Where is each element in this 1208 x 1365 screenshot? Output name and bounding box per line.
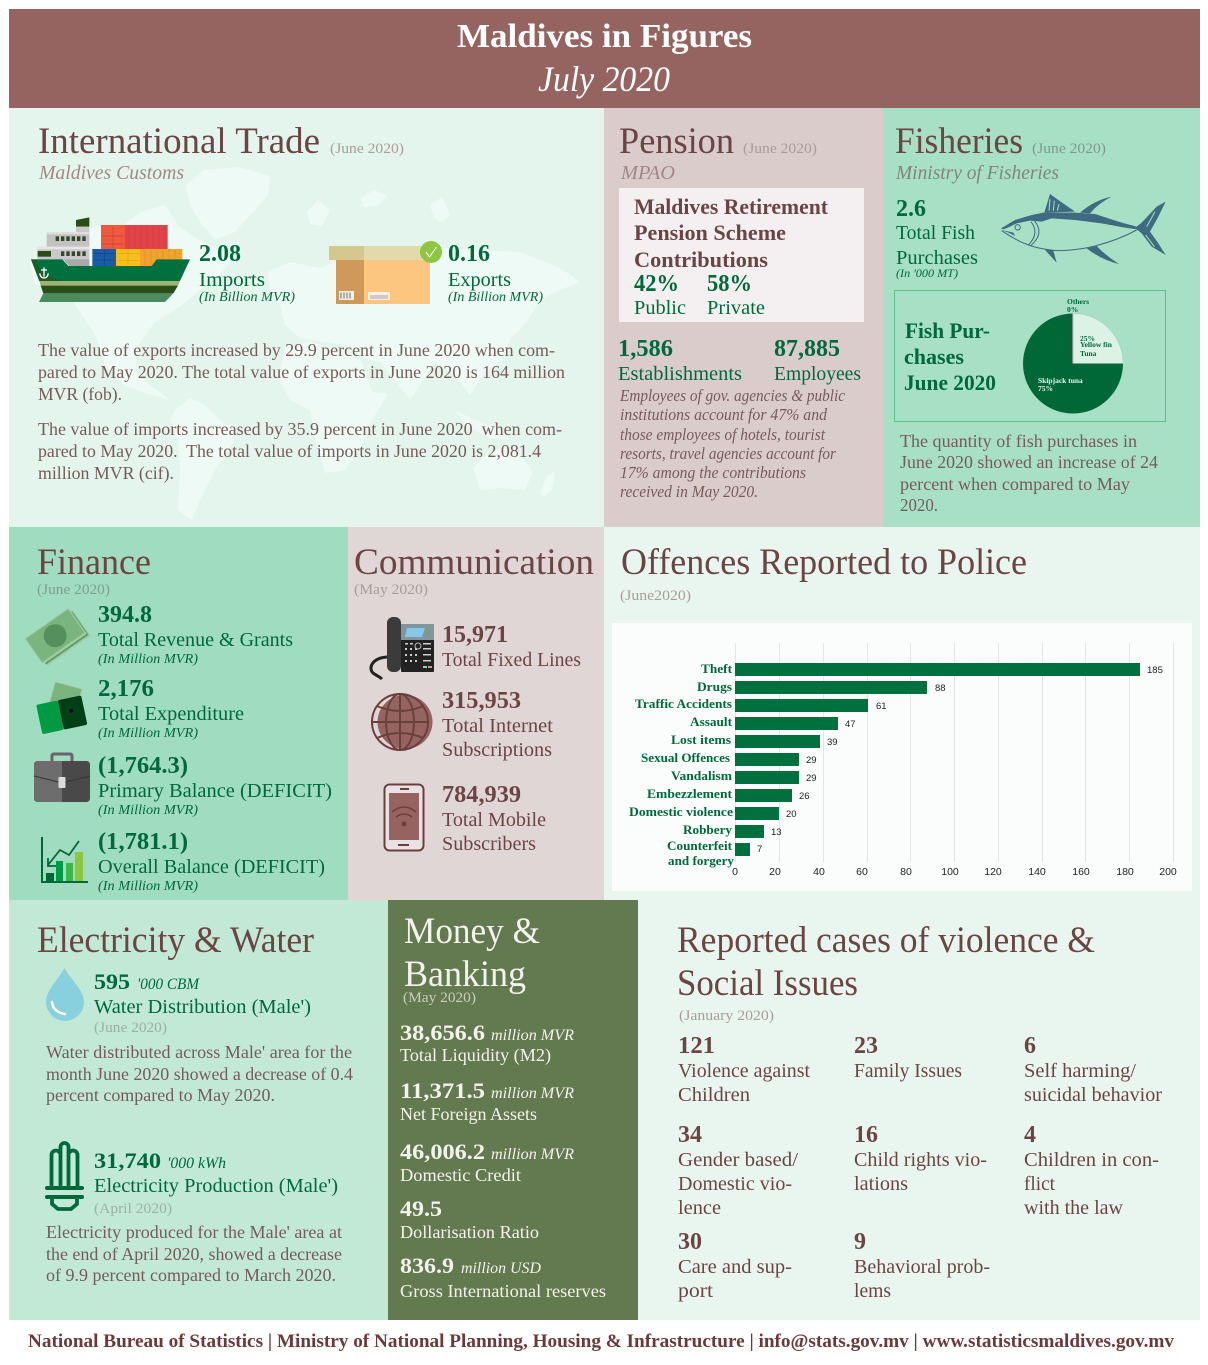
- reserves figure: 836.9: [400, 1253, 454, 1278]
- employees figure: [774, 336, 861, 385]
- pie chart: 25%: [1080, 334, 1095, 343]
- card: retirement scheme: Public: [634, 297, 686, 319]
- case: self harming: Self harming/: [1024, 1060, 1136, 1082]
- fish purchases figure: Purchases: [896, 247, 978, 269]
- pie chart: Tuna: [1080, 349, 1097, 358]
- heading: Fisheries: [895, 121, 1023, 162]
- dollarisation figure: Dollarisation Ratio: [400, 1222, 539, 1242]
- text: exports paragraph: pared to May 2020. The total value of exports in June 2020 is 164 million: [38, 362, 565, 382]
- bar chart: 61: [876, 701, 887, 712]
- heading: Reported cases of violence &: [677, 920, 1095, 961]
- liquidity figure: million MVR: [491, 1027, 574, 1044]
- bar chart: 13: [771, 827, 782, 838]
- bar chart: 185: [1147, 665, 1163, 676]
- chart heading: [904, 318, 996, 395]
- imports figure: Imports: [199, 269, 265, 291]
- case: gender based violence: Domestic vio-: [678, 1173, 792, 1195]
- heading: Finance: [37, 542, 151, 583]
- exports figure: [448, 241, 543, 305]
- case: child rights: [854, 1122, 987, 1195]
- revenue figure: Total Revenue & Grants: [98, 629, 293, 651]
- case: gender based violence: 34: [678, 1122, 702, 1148]
- electricity figure: (April 2020): [94, 1201, 172, 1217]
- text: fisheries note: [900, 431, 1158, 515]
- foreign assets figure: Net Foreign Assets: [400, 1104, 537, 1124]
- bar chart: 80: [900, 866, 912, 878]
- icon: wallet: [36, 682, 87, 734]
- date: (June2020): [620, 588, 691, 604]
- case: care and support: [678, 1229, 792, 1302]
- pie chart: Skipjack tuna: [1038, 376, 1083, 385]
- text: imports paragraph: [38, 419, 562, 483]
- exports figure: (In Billion MVR): [448, 290, 543, 305]
- case: children in conflict: 4: [1024, 1122, 1036, 1148]
- icon: bar chart with arrow: [42, 837, 88, 882]
- case: children in conflict: [1024, 1122, 1159, 1219]
- case: behavioral problems: [854, 1229, 990, 1302]
- heading: Pension: [619, 121, 734, 162]
- internet figure: Subscriptions: [442, 739, 552, 761]
- heading: Banking: [404, 954, 526, 995]
- bar chart: 60: [856, 866, 868, 878]
- bar chart: 29: [806, 755, 817, 766]
- mobile figure: [442, 782, 546, 855]
- heading: [404, 911, 540, 995]
- liquidity figure: [400, 1020, 574, 1066]
- fish purchases figure: (In '000 MT): [896, 266, 958, 280]
- text: water note: percent compared to May 2020.: [46, 1085, 275, 1105]
- text: water note: Water distributed across Male' area for the: [46, 1042, 352, 1062]
- bar chart: Vandalism: [671, 769, 733, 783]
- bar chart: and forgery: [668, 854, 735, 868]
- primary balance figure: [98, 753, 332, 818]
- case: child rights: lations: [854, 1173, 908, 1195]
- title: Maldives in Figures: [457, 18, 752, 55]
- icon: water drop: [46, 968, 84, 1021]
- bar chart: 160: [1072, 866, 1090, 878]
- overall balance figure: (In Million MVR): [98, 879, 198, 894]
- mobile figure: 784,939: [442, 782, 521, 808]
- establishments figure: Establishments: [618, 363, 742, 385]
- domestic credit figure: Domestic Credit: [400, 1165, 521, 1185]
- domestic credit figure: million MVR: [491, 1146, 574, 1163]
- text: fisheries note: June 2020 showed an increase of 24: [900, 452, 1158, 472]
- water figure: 595: [94, 969, 130, 994]
- reserves figure: [400, 1253, 606, 1301]
- case: self harming: 6: [1024, 1033, 1036, 1059]
- heading: Money &: [404, 911, 540, 952]
- text: exports paragraph: MVR (fob).: [38, 384, 122, 404]
- heading: Social Issues: [677, 963, 858, 1004]
- case: children in conflict: flict: [1024, 1173, 1055, 1195]
- pie chart: Yellow fin: [1080, 340, 1113, 349]
- case: behavioral problems: Behavioral prob-: [854, 1256, 990, 1278]
- dollarisation figure: 49.5: [400, 1196, 442, 1221]
- source: Maldives Customs: [38, 162, 184, 184]
- case: care and support: Care and sup-: [678, 1256, 792, 1278]
- date: (June 2020): [37, 582, 110, 598]
- heading: International Trade: [38, 121, 320, 162]
- case: behavioral problems: lems: [854, 1280, 891, 1302]
- bar chart: Robbery: [683, 823, 733, 837]
- bar chart: 20: [786, 809, 797, 820]
- text: electricity note: of 9.9 percent compared to March 2020.: [46, 1265, 336, 1285]
- source: Ministry of Fisheries: [895, 162, 1059, 184]
- expenditure figure: (In Million MVR): [98, 726, 198, 741]
- date: (May 2020): [403, 990, 476, 1006]
- card: retirement scheme: [619, 188, 864, 322]
- case: violence against children: Violence against: [678, 1060, 810, 1082]
- case: violence against children: Children: [678, 1084, 750, 1106]
- chart heading: June 2020: [904, 370, 996, 395]
- expenditure figure: Total Expenditure: [98, 703, 244, 725]
- case: violence against children: [678, 1033, 810, 1106]
- fixed lines figure: 15,971: [442, 622, 508, 648]
- water figure: '000 CBM: [137, 976, 201, 993]
- text: pension note: those employees of hotels, tourist: [620, 425, 825, 444]
- electricity figure: 31,740: [94, 1148, 161, 1173]
- icon: tuna fish: [1001, 194, 1166, 264]
- electricity figure: Electricity Production (Male'): [94, 1175, 338, 1197]
- date: (June 2020): [330, 141, 404, 157]
- case: self harming: [1024, 1033, 1162, 1106]
- heading: Offences Reported to Police: [621, 542, 1027, 583]
- date: (May 2020): [354, 582, 428, 598]
- employees figure: 87,885: [774, 336, 840, 362]
- bar chart: Traffic Accidents: [635, 697, 732, 711]
- bar chart: Lost items: [671, 733, 731, 747]
- card: retirement scheme: Private: [707, 297, 765, 319]
- text: pension note: institutions account for 47% and: [620, 405, 828, 424]
- text: water note: month June 2020 showed a decrease of 0.4: [46, 1064, 353, 1084]
- case: gender based violence: lence: [678, 1197, 721, 1219]
- icon: banknotes: [26, 607, 91, 667]
- electricity figure: [94, 1148, 338, 1217]
- domestic credit figure: [400, 1139, 574, 1185]
- bar chart: 29: [806, 773, 817, 784]
- card: retirement scheme: 42%: [634, 271, 679, 297]
- foreign assets figure: [400, 1078, 574, 1124]
- text: fisheries note: 2020.: [900, 495, 938, 515]
- text: fisheries note: percent when compared to May: [900, 474, 1130, 494]
- imports figure: [199, 241, 295, 305]
- text: pension note: 17% among the contributions: [620, 463, 806, 482]
- bar chart: 26: [799, 791, 810, 802]
- case: gender based violence: Gender based/: [678, 1149, 798, 1171]
- establishments figure: 1,586: [618, 336, 673, 362]
- heading: Electricity & Water: [37, 920, 314, 961]
- icon: globe: [372, 694, 432, 750]
- case: child rights: Child rights vio-: [854, 1149, 987, 1171]
- header banner: [9, 9, 1200, 108]
- revenue figure: (In Million MVR): [98, 652, 198, 667]
- internet figure: [442, 688, 553, 761]
- reserves figure: Gross International reserves: [400, 1281, 606, 1301]
- pie chart: 75%: [1038, 384, 1053, 393]
- panel: fisheries: [883, 108, 1200, 527]
- bar chart: Assault: [690, 715, 733, 729]
- pie chart: 0%: [1067, 305, 1078, 314]
- exports figure: Exports: [448, 269, 511, 291]
- bar chart: 200: [1159, 866, 1177, 878]
- case: self harming: suicidal behavior: [1024, 1084, 1162, 1106]
- bar chart: 40: [813, 866, 825, 878]
- mobile figure: Total Mobile: [442, 809, 546, 831]
- case: care and support: port: [678, 1280, 713, 1302]
- heading: [677, 920, 1095, 1004]
- foreign assets figure: 11,371.5: [400, 1078, 485, 1103]
- dollarisation figure: [400, 1196, 539, 1242]
- heading: Communication: [354, 542, 594, 583]
- establishments figure: [618, 336, 742, 385]
- icon: mobile phone: [384, 784, 424, 850]
- card: retirement scheme: Contributions: [634, 247, 768, 272]
- bar chart: Embezzlement: [647, 787, 733, 801]
- primary balance figure: Primary Balance (DEFICIT): [98, 780, 332, 802]
- panel: communication: [348, 527, 604, 900]
- card: retirement scheme: Maldives Retirement: [634, 194, 829, 219]
- case: children in conflict: with the law: [1024, 1197, 1124, 1219]
- imports figure: (In Billion MVR): [199, 290, 295, 305]
- imports figure: 2.08: [199, 241, 241, 267]
- case: family issues: [854, 1033, 962, 1082]
- bar chart: Theft: [701, 662, 733, 676]
- bar chart: 140: [1028, 866, 1046, 878]
- expenditure figure: [98, 676, 244, 741]
- case: children in conflict: Children in con-: [1024, 1149, 1159, 1171]
- date: (January 2020): [679, 1008, 774, 1024]
- water figure: [94, 969, 311, 1036]
- liquidity figure: Total Liquidity (M2): [400, 1045, 551, 1066]
- water figure: Water Distribution (Male'): [94, 996, 311, 1018]
- primary balance figure: (1,764.3): [98, 753, 188, 779]
- fixed lines figure: [442, 622, 581, 671]
- bar chart: 39: [827, 737, 838, 748]
- panel: electricity and water: [9, 900, 388, 1320]
- electricity figure: '000 kWh: [167, 1155, 226, 1172]
- mobile figure: Subscribers: [442, 833, 536, 855]
- internet figure: 315,953: [442, 688, 521, 714]
- bar chart: [612, 623, 1192, 891]
- overall balance figure: [98, 829, 325, 894]
- bar chart: Sexual Offences: [641, 751, 730, 765]
- date: (June 2020): [743, 141, 817, 157]
- pie chart: Others: [1067, 297, 1089, 306]
- employees figure: Employees: [774, 363, 861, 385]
- fish purchases figure: Total Fish: [896, 222, 975, 244]
- text: fisheries note: The quantity of fish purchases in: [900, 431, 1137, 451]
- panel: money and banking: [388, 900, 638, 1320]
- icon: container ship: [31, 217, 190, 302]
- text: pension note: received in May 2020.: [620, 482, 758, 501]
- reserves figure: million USD: [461, 1260, 541, 1277]
- source: MPAO: [620, 162, 675, 184]
- panel: pension: [604, 108, 883, 527]
- icon: desk phone: [371, 617, 434, 679]
- text: pension note: [619, 386, 846, 501]
- chart heading: chases: [904, 344, 964, 369]
- pie chart: [1023, 297, 1123, 414]
- bar chart: 100: [941, 866, 959, 878]
- text: exports paragraph: The value of exports increased by 29.9 percent in June 2020 when com-: [38, 340, 555, 360]
- text: pension note: Employees of gov. agencies & public: [619, 386, 846, 405]
- overall balance figure: (1,781.1): [98, 829, 188, 855]
- case: child rights: 16: [854, 1122, 878, 1148]
- footer: National Bureau of Statistics | Ministry of National Planning, Housing & Infrastructure | info@stats.gov.mv | www.statisticsmaldives.gov.mv: [28, 1331, 1174, 1352]
- bar chart: 88: [935, 683, 946, 694]
- case: family issues: 23: [854, 1033, 878, 1059]
- case: violence against children: 121: [678, 1033, 715, 1059]
- fish purchases figure: 2.6: [896, 196, 926, 222]
- bar chart: 7: [757, 844, 762, 855]
- fish purchases figure: [896, 196, 978, 280]
- primary balance figure: (In Million MVR): [98, 803, 198, 818]
- text: imports paragraph: million MVR (cif).: [38, 463, 174, 483]
- bar chart: 47: [845, 719, 856, 730]
- panel: finance: [9, 527, 348, 900]
- panel: violence and social issues: [638, 900, 1200, 1320]
- text: electricity note: [46, 1222, 342, 1285]
- overall balance figure: Overall Balance (DEFICIT): [98, 856, 325, 878]
- card: retirement scheme: Pension Scheme: [634, 220, 786, 245]
- text: imports paragraph: pared to May 2020. The total value of imports in June 2020 is 2,081.4: [38, 441, 541, 461]
- bar chart: Drugs: [697, 680, 732, 694]
- world map background: [30, 167, 580, 520]
- fixed lines figure: Total Fixed Lines: [442, 649, 581, 671]
- text: imports paragraph: The value of imports increased by 35.9 percent in June 2020 when com-: [38, 419, 562, 439]
- case: gender based violence: [678, 1122, 798, 1219]
- case: behavioral problems: 9: [854, 1229, 866, 1255]
- chart heading: Fish Pur-: [905, 318, 990, 343]
- liquidity figure: 38,656.6: [400, 1020, 485, 1045]
- expenditure figure: 2,176: [98, 676, 154, 702]
- icon: briefcase: [34, 754, 90, 802]
- domestic credit figure: 46,006.2: [400, 1139, 485, 1164]
- bar chart: 120: [984, 866, 1002, 878]
- bar chart: 0: [732, 866, 738, 878]
- date: (June 2020): [1032, 141, 1106, 157]
- bar chart: 20: [769, 866, 781, 878]
- icon: export box: [329, 241, 442, 304]
- case: family issues: Family Issues: [854, 1060, 962, 1082]
- case: care and support: 30: [678, 1229, 702, 1255]
- text: electricity note: Electricity produced for the Male' area at: [46, 1222, 342, 1242]
- revenue figure: 394.8: [98, 602, 152, 628]
- foreign assets figure: million MVR: [491, 1085, 574, 1102]
- text: exports paragraph: [38, 340, 565, 404]
- box: fish purchases chart: [894, 290, 1166, 422]
- bar chart: Counterfeit: [667, 839, 733, 853]
- text: water note: [46, 1042, 353, 1105]
- panel: offences: [604, 527, 1200, 900]
- panel: international trade: [9, 108, 604, 527]
- text: pension note: resorts, travel agencies account for: [620, 444, 837, 463]
- card: retirement scheme: 58%: [707, 271, 752, 297]
- internet figure: Total Internet: [442, 715, 553, 737]
- revenue figure: [98, 602, 293, 667]
- icon: light bulb: [47, 1143, 82, 1209]
- subtitle: July 2020: [538, 59, 670, 99]
- water figure: (June 2020): [94, 1020, 167, 1036]
- text: electricity note: the end of April 2020, showed a decrease: [46, 1244, 342, 1264]
- bar chart: Domestic violence: [629, 805, 733, 819]
- exports figure: 0.16: [448, 241, 490, 267]
- bar chart: 180: [1116, 866, 1134, 878]
